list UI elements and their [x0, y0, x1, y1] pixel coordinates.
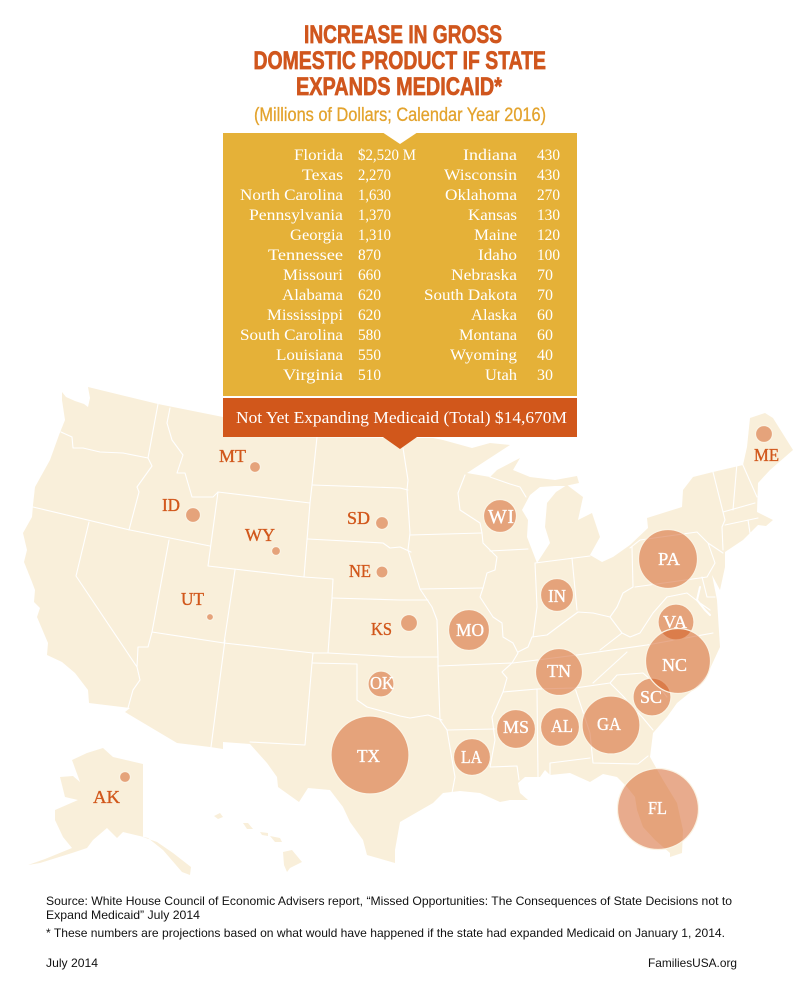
state abbreviations inside bubbles: MS: [503, 717, 529, 737]
right column: states and values: Utah: [485, 367, 517, 384]
bubble: Oklahoma: [368, 671, 394, 697]
right column: states and values: 120: [537, 227, 560, 244]
left column: states and values: Missouri: [283, 267, 344, 284]
left column: states and values: 1,630: [358, 187, 391, 204]
left column: states and values: Texas: [302, 167, 343, 184]
bubble: Alabama: [540, 708, 580, 746]
left column: states and values: North Carolina: [240, 187, 343, 204]
total banner: [223, 398, 577, 449]
bubble: Maine: [756, 426, 772, 442]
state abbreviations outside bubbles: UT: [181, 589, 204, 609]
left column: states and values: 620: [358, 287, 381, 304]
right column: states and values: Oklahoma: [445, 187, 517, 204]
state abbreviations outside bubbles: ID: [162, 495, 180, 515]
right column: states and values: 100: [537, 247, 560, 264]
left column: states and values: 1,370: [358, 207, 391, 224]
bubble: Indiana: [540, 578, 574, 612]
left column: states and values: 660: [358, 267, 381, 284]
left column: states and values: 620: [358, 307, 381, 324]
right column: states and values: Montana: [459, 327, 517, 344]
bubble: Tennessee: [536, 648, 582, 696]
bubble: Virginia: [658, 604, 694, 640]
bubble: Georgia: [582, 696, 640, 754]
state abbreviations outside bubbles: WY: [245, 525, 275, 545]
state abbreviations inside bubbles: AL: [551, 716, 573, 736]
left column: states and values: Louisiana: [276, 347, 343, 364]
right column: states and values: 70: [537, 287, 553, 304]
footnote: * These numbers are projections based on what would have happened if the state had expanded Medicaid on January 1, 2014.: [46, 926, 725, 940]
right column: states and values: Wisconsin: [444, 167, 517, 184]
bubble: Pennsylvania: [638, 530, 698, 588]
right column: states and values: Indiana: [463, 147, 517, 164]
title: INCREASE IN GROSS: [304, 21, 502, 49]
state abbreviations inside bubbles: VA: [663, 612, 687, 632]
left column: states and values: [240, 147, 416, 384]
banner text: Not Yet Expanding Medicaid (Total) $14,670M: [236, 408, 567, 427]
left column: states and values: 580: [358, 327, 381, 344]
map: Hawaii: [214, 813, 302, 872]
state abbreviations inside bubbles: FL: [648, 798, 667, 818]
state abbreviations outside bubbles: KS: [371, 619, 392, 639]
state abbreviations inside bubbles: OK: [370, 673, 394, 693]
bubble: Florida: [618, 768, 698, 850]
right column: states and values: Wyoming: [450, 347, 517, 364]
left column: states and values: Virginia: [283, 367, 343, 384]
right column: states and values: 40: [537, 347, 553, 364]
left column: states and values: 2,270: [358, 167, 391, 184]
bubble: Idaho: [186, 508, 200, 522]
state bubbles: [120, 426, 772, 850]
state abbreviations inside bubbles: GA: [597, 714, 621, 734]
title: DOMESTIC PRODUCT IF STATE: [254, 47, 546, 75]
bubble: South Dakota: [376, 516, 388, 530]
state abbreviations inside bubbles: WI: [488, 506, 514, 528]
state abbreviations inside bubbles: TN: [547, 661, 571, 681]
state abbreviations outside bubbles: AK: [93, 787, 120, 807]
right column: states and values: 130: [537, 207, 560, 224]
left column: states and values: Mississippi: [267, 307, 344, 324]
left column: states and values: Georgia: [290, 227, 343, 244]
bubble: Nebraska: [376, 566, 388, 578]
state abbreviations inside bubbles: NC: [662, 655, 687, 675]
state abbreviations inside bubbles: IN: [548, 586, 566, 606]
state abbreviations inside bubbles: [357, 506, 687, 818]
bubble: Louisiana: [454, 738, 490, 776]
state abbreviations outside bubbles: NE: [349, 561, 371, 581]
right column: states and values: Idaho: [478, 247, 517, 264]
left column: states and values: Alabama: [282, 287, 343, 304]
state abbreviations outside bubbles: [93, 445, 779, 807]
bubble: North Carolina: [646, 628, 710, 694]
state abbreviations inside bubbles: LA: [461, 747, 482, 767]
bubble: South Carolina: [633, 678, 671, 716]
bubble: Texas: [331, 716, 409, 794]
state abbreviations inside bubbles: MO: [456, 620, 484, 640]
state abbreviations outside bubbles: SD: [347, 508, 370, 528]
right column: states and values: 430: [537, 167, 560, 184]
map: state borders: [33, 404, 758, 793]
bubble: Montana: [250, 462, 260, 472]
bubble: Missouri: [448, 610, 490, 650]
title: [254, 21, 546, 101]
state abbreviations inside bubbles: TX: [357, 746, 380, 766]
bubble: Mississippi: [496, 710, 536, 748]
map: contiguous states: [23, 387, 793, 863]
left column: states and values: Florida: [294, 147, 343, 164]
left column: states and values: 870: [358, 247, 381, 264]
left column: states and values: $2,520 M: [358, 147, 416, 164]
bubble: Utah: [206, 614, 214, 620]
bubble: Wisconsin: [484, 500, 516, 532]
right column: states and values: Alaska: [471, 307, 517, 324]
bubble: Alaska: [120, 772, 130, 782]
map: Alaska: [28, 748, 191, 875]
left column: states and values: Pennsylvania: [249, 207, 343, 224]
website: FamiliesUSA.org: [648, 956, 737, 970]
date: July 2014: [46, 956, 98, 970]
right column: states and values: South Dakota: [424, 287, 517, 304]
source note: Source: White House Council of Economic Advisers report, “Missed Opportunities: The Consequences of State Decisions not to: [46, 894, 732, 908]
banner background with pointer: [223, 398, 577, 449]
state abbreviations outside bubbles: ME: [754, 445, 779, 465]
left column: states and values: 1,310: [358, 227, 391, 244]
state abbreviations inside bubbles: SC: [640, 687, 662, 707]
state abbreviations outside bubbles: MT: [219, 446, 246, 466]
right column: states and values: 30: [537, 367, 553, 384]
right column: states and values: 60: [537, 327, 553, 344]
subtitle: (Millions of Dollars; Calendar Year 2016): [254, 105, 546, 126]
right column: states and values: Nebraska: [451, 267, 517, 284]
panel: state table: [223, 133, 577, 396]
title: EXPANDS MEDICAID*: [296, 73, 502, 101]
state abbreviations inside bubbles: PA: [658, 549, 680, 569]
map of the United States: [23, 387, 793, 875]
panel background: [223, 133, 577, 396]
right column: states and values: 430: [537, 147, 560, 164]
source note: Expand Medicaid” July 2014: [46, 908, 200, 922]
right column: states and values: 270: [537, 187, 560, 204]
right column: states and values: 60: [537, 307, 553, 324]
right column: states and values: Maine: [474, 227, 517, 244]
left column: states and values: South Carolina: [240, 327, 343, 344]
right column: states and values: Kansas: [468, 207, 517, 224]
bubble: Wyoming: [272, 546, 280, 556]
source note: [46, 894, 732, 922]
left column: states and values: 550: [358, 347, 381, 364]
right column: states and values: 70: [537, 267, 553, 284]
left column: states and values: 510: [358, 367, 381, 384]
right column: states and values: [424, 147, 560, 384]
bubble: Kansas: [400, 614, 418, 632]
left column: states and values: Tennessee: [268, 247, 343, 264]
